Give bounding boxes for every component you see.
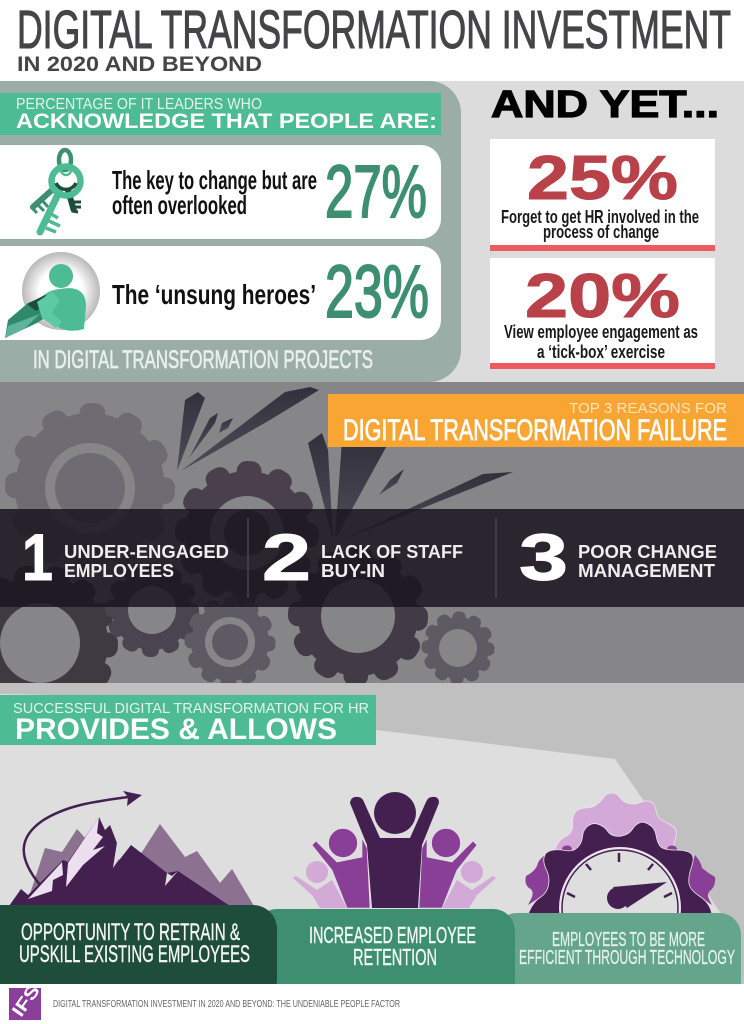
- reason 2: LACK OF STAFF: [321, 542, 463, 562]
- tab: mid green: [255, 909, 515, 1003]
- reason 3: MANAGEMENT: [578, 561, 715, 581]
- tab: light green: [495, 913, 741, 1003]
- stat: 25%: 25%: [527, 144, 678, 213]
- icon: IFS logo: IFS: [8, 981, 44, 1020]
- icon: gear right: [298, 556, 418, 676]
- reason 1: 1: [22, 520, 53, 594]
- icon: gear large: [5, 403, 175, 509]
- reason 1: UNDER-ENGAGED: [64, 542, 229, 562]
- reason 3: POOR CHANGE: [578, 542, 717, 562]
- panel: provides and allows: [0, 683, 744, 984]
- icon: gear centre: [185, 471, 309, 595]
- stat: 23%: 23%: [325, 250, 429, 333]
- stat: 27%: 27%: [325, 150, 427, 233]
- heading banner: provides and allows: [0, 695, 376, 746]
- reason 2: 2: [262, 520, 311, 594]
- icon: gear ring: [191, 603, 269, 681]
- panel: and yet background: [0, 81, 744, 383]
- icon: mountains with arrow: [9, 791, 254, 906]
- title: IN 2020 AND BEYOND: [17, 53, 262, 76]
- footer: [0, 981, 744, 1024]
- heading banner: IT leaders: [0, 93, 441, 135]
- icon: person with key: [5, 252, 100, 338]
- icon: broken shards: [177, 387, 513, 540]
- card: key to change: [0, 145, 441, 239]
- card: 20%: [490, 258, 715, 369]
- heading banner: IT leaders: PERCENTAGE OF IT LEADERS WHO: [16, 96, 262, 113]
- reason 1: EMPLOYEES: [64, 561, 174, 581]
- heading banner: IT leaders: ACKNOWLEDGE THAT PEOPLE ARE:: [16, 110, 437, 133]
- reason 3: 3: [519, 520, 568, 594]
- card: unsung heroes: [0, 246, 441, 340]
- reason 1: [25, 534, 228, 580]
- icon: gear bottom left: [0, 575, 108, 711]
- tab: mid green: RETENTION: [353, 944, 437, 970]
- icon: gear small: [112, 570, 192, 650]
- heading banner: failure: TOP 3 REASONS FOR: [569, 400, 727, 417]
- text: source: DIGITAL TRANSFORMATION INVESTMENT IN 2020 AND BEYOND: THE UNDENIABLE PEOPLE FACTOR: [53, 999, 400, 1010]
- tab: mid green: INCREASED EMPLOYEE: [309, 922, 476, 948]
- text: engagement: a ‘tick-box’ exercise: [537, 342, 665, 362]
- icon: group of people cheering: [293, 792, 496, 908]
- text: in digital transformation projects: IN DIGITAL TRANSFORMATION PROJECTS: [33, 346, 373, 374]
- tab: dark green: [0, 905, 277, 1003]
- stat: 20%: 20%: [525, 262, 680, 331]
- icon: gear tiny: [427, 617, 489, 679]
- text: HR involvement: [501, 207, 699, 242]
- card: 25%: [490, 139, 715, 251]
- text: key to change: The key to change but are: [112, 165, 317, 195]
- text: key to change: [112, 165, 317, 220]
- reason 2: BUY-IN: [321, 561, 385, 581]
- text: engagement: [504, 322, 698, 362]
- icon: gauge in gears: [525, 793, 715, 969]
- text: HR involvement: process of change: [543, 222, 659, 242]
- heading banner: provides and allows: SUCCESSFUL DIGITAL TRANSFORMATION FOR HR: [13, 700, 369, 717]
- icon: keys: [31, 150, 81, 232]
- panel: failure reasons: [0, 382, 744, 711]
- reason 2: [264, 534, 462, 580]
- tab: dark green: UPSKILL EXISTING EMPLOYEES: [19, 941, 250, 968]
- panel: IT leaders: [0, 81, 461, 382]
- text: unsung heroes: The ‘unsung heroes’: [112, 279, 316, 310]
- tab: dark green: OPPORTUNITY TO RETRAIN &: [21, 919, 240, 946]
- heading banner: provides and allows: PROVIDES & ALLOWS: [15, 713, 337, 746]
- heading banner: failure: [328, 394, 744, 447]
- heading: and yet: AND YET...: [491, 84, 719, 126]
- band: reasons: [0, 509, 744, 607]
- reason 3: [520, 533, 716, 581]
- text: key to change: often overlooked: [112, 190, 247, 220]
